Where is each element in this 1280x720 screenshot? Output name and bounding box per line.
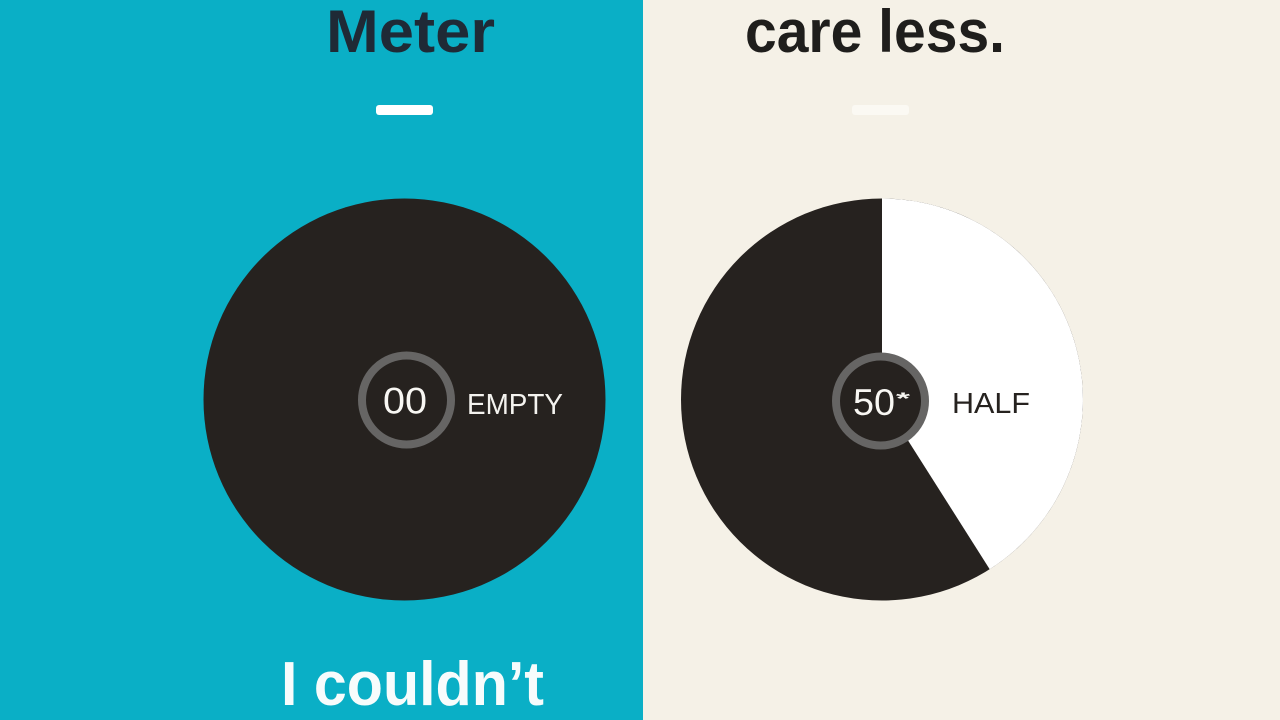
heading: care less.: care less. [745,0,1005,65]
heading: Meter: Meter [326,0,495,65]
label: EMPTY: EMPTY [467,389,563,421]
heading: I couldn't: I couldn’t [281,650,544,719]
chart: half meter [681,198,1083,600]
dial disc: dark portion [681,198,1083,600]
left white dash [376,105,433,115]
value: 00: 00 [383,380,427,422]
small mark beside value: * [896,389,911,408]
white wedge [882,198,1083,569]
panel: left teal background [0,0,643,720]
right white dash [852,105,909,115]
chart: empty meter [204,198,606,600]
panel: right cream background [643,0,1280,720]
label: HALF: HALF [952,388,1030,420]
dial disc: fully dark [204,198,606,600]
center ring: 00 [362,356,451,444]
center ring: 50 [836,356,925,446]
value: 50: 50 [853,382,895,423]
